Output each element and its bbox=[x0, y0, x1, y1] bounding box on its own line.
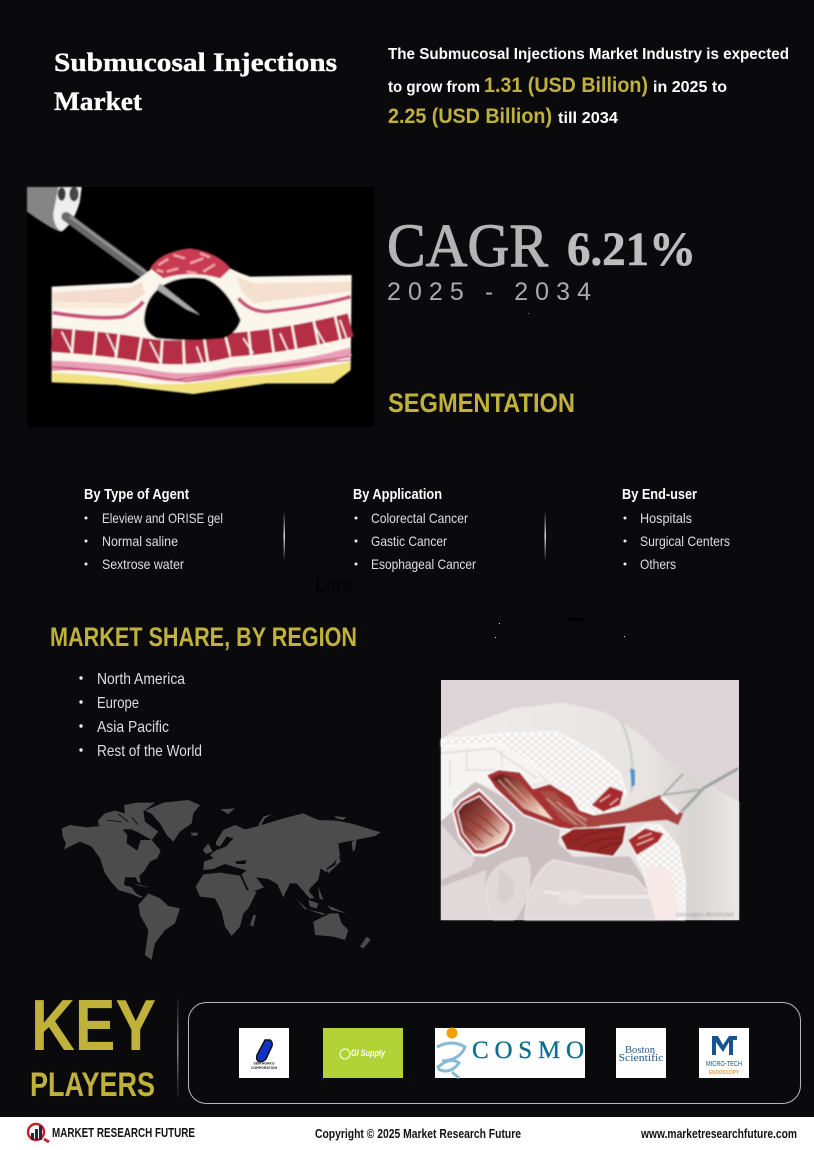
footer bbox=[0, 1117, 814, 1150]
segment list: by type of agent: Normal saline bbox=[102, 533, 178, 549]
segment list: by application: Esophageal Cancer bbox=[371, 556, 476, 572]
title bbox=[54, 47, 337, 116]
key players heading bbox=[30, 986, 156, 1104]
key players panel bbox=[188, 1002, 800, 1104]
footer: Copyright © 2025 Market Research Future bbox=[315, 1127, 521, 1141]
illustration: pelvic cross-section: Georges Bertholet bbox=[676, 912, 735, 919]
central retracted muscle bbox=[587, 795, 683, 827]
logo: Micro-Tech Endoscopy bbox=[699, 1028, 749, 1078]
segment list: by end-user: Hospitals bbox=[640, 510, 692, 526]
logo: Boston Scientific bbox=[616, 1028, 666, 1078]
colon cross-section bbox=[452, 788, 515, 857]
surgical clamp bbox=[662, 768, 738, 813]
lower fold bbox=[560, 825, 627, 857]
market growth summary: till 2034 bbox=[558, 110, 618, 127]
region list: Rest of the World bbox=[97, 743, 202, 760]
market growth summary: in 2025 to bbox=[653, 79, 727, 96]
right fat pad bbox=[628, 825, 685, 920]
logo: Cosmo bbox=[435, 1028, 585, 1078]
injected fluid cushion bbox=[144, 277, 241, 340]
rectum muscle tube bbox=[486, 769, 600, 835]
market growth summary bbox=[388, 46, 789, 128]
CAGR value: 2025 - 2034 bbox=[387, 278, 591, 306]
abdominal wall bbox=[441, 742, 545, 822]
logo: Cosmo: COSMO bbox=[472, 1037, 584, 1064]
segmentation heading: SEGMENTATION bbox=[388, 388, 575, 418]
logo: Seikagaku: CORPORATION bbox=[251, 1066, 277, 1070]
polyp lesion bbox=[150, 248, 231, 278]
segment list: by type of agent: By Type of Agent bbox=[84, 486, 189, 503]
segment list: by application bbox=[353, 486, 476, 572]
footer: MARKET RESEARCH FUTURE bbox=[52, 1126, 195, 1140]
segment list: by type of agent bbox=[84, 486, 223, 572]
logo: Seikagaku bbox=[239, 1028, 289, 1078]
logo: Boston Scientific: Scientific bbox=[618, 1052, 664, 1064]
logo: Micro-Tech Endoscopy: ENDOSCOPY bbox=[709, 1070, 739, 1076]
region list: North America bbox=[97, 671, 185, 688]
cut muscle blocks bbox=[592, 787, 663, 855]
segment list: by type of agent: Eleview and ORISE gel bbox=[102, 510, 223, 526]
segment list: by end-user: Surgical Centers bbox=[640, 533, 730, 549]
CAGR value bbox=[387, 213, 696, 306]
market growth summary: 2.25 (USD Billion) bbox=[388, 105, 552, 128]
segment list: by end-user bbox=[622, 486, 730, 572]
market share heading: MARKET SHARE, BY REGION bbox=[50, 622, 357, 652]
segment list: by application: Colorectal Cancer bbox=[371, 510, 468, 526]
icon: endoscope tip bbox=[27, 187, 147, 276]
world map bbox=[62, 800, 381, 960]
logo: GI Supply: GI Supply bbox=[351, 1048, 386, 1058]
segment list: by type of agent: Sextrose water bbox=[102, 556, 184, 572]
text: Lore bbox=[315, 575, 352, 595]
illustration: pelvic cross-section bbox=[441, 680, 739, 920]
key players heading: KEY bbox=[31, 986, 156, 1066]
key players heading: PLAYERS bbox=[30, 1066, 155, 1104]
region list: Europe bbox=[97, 695, 139, 712]
logo: Boston Scientific: Boston bbox=[625, 1045, 656, 1056]
market growth summary: The Submucosal Injections Market Industry is expected bbox=[388, 46, 789, 63]
market growth summary: 1.31 (USD Billion) bbox=[484, 74, 648, 97]
tissue layers bbox=[52, 267, 352, 394]
segment list: by application: Gastic Cancer bbox=[371, 533, 447, 549]
segment list: by end-user: Others bbox=[640, 556, 676, 572]
logo: Micro-Tech Endoscopy: MICRO-TECH bbox=[706, 1061, 742, 1068]
CAGR value: 6.21% bbox=[567, 223, 696, 276]
logo: Seikagaku: SEIKAGAKU bbox=[253, 1062, 275, 1066]
market growth summary: to grow from bbox=[388, 79, 480, 96]
title: Submucosal Injections bbox=[54, 47, 337, 77]
segment list: by end-user: By End-user bbox=[622, 486, 697, 503]
illustration: submucosal injection through tissue bbox=[27, 187, 374, 427]
catheter bbox=[621, 720, 635, 793]
upper fat pad bbox=[441, 732, 627, 815]
title: Market bbox=[54, 86, 142, 116]
lower pelvis bbox=[441, 782, 657, 920]
icon: market research future logo bbox=[28, 1124, 49, 1142]
needle bbox=[157, 283, 200, 315]
segment list: by application: By Application bbox=[353, 486, 442, 503]
logo: GI Supply bbox=[323, 1028, 403, 1078]
region list: Asia Pacific bbox=[97, 719, 169, 736]
CAGR value: CAGR bbox=[387, 213, 548, 280]
region list bbox=[79, 671, 202, 760]
